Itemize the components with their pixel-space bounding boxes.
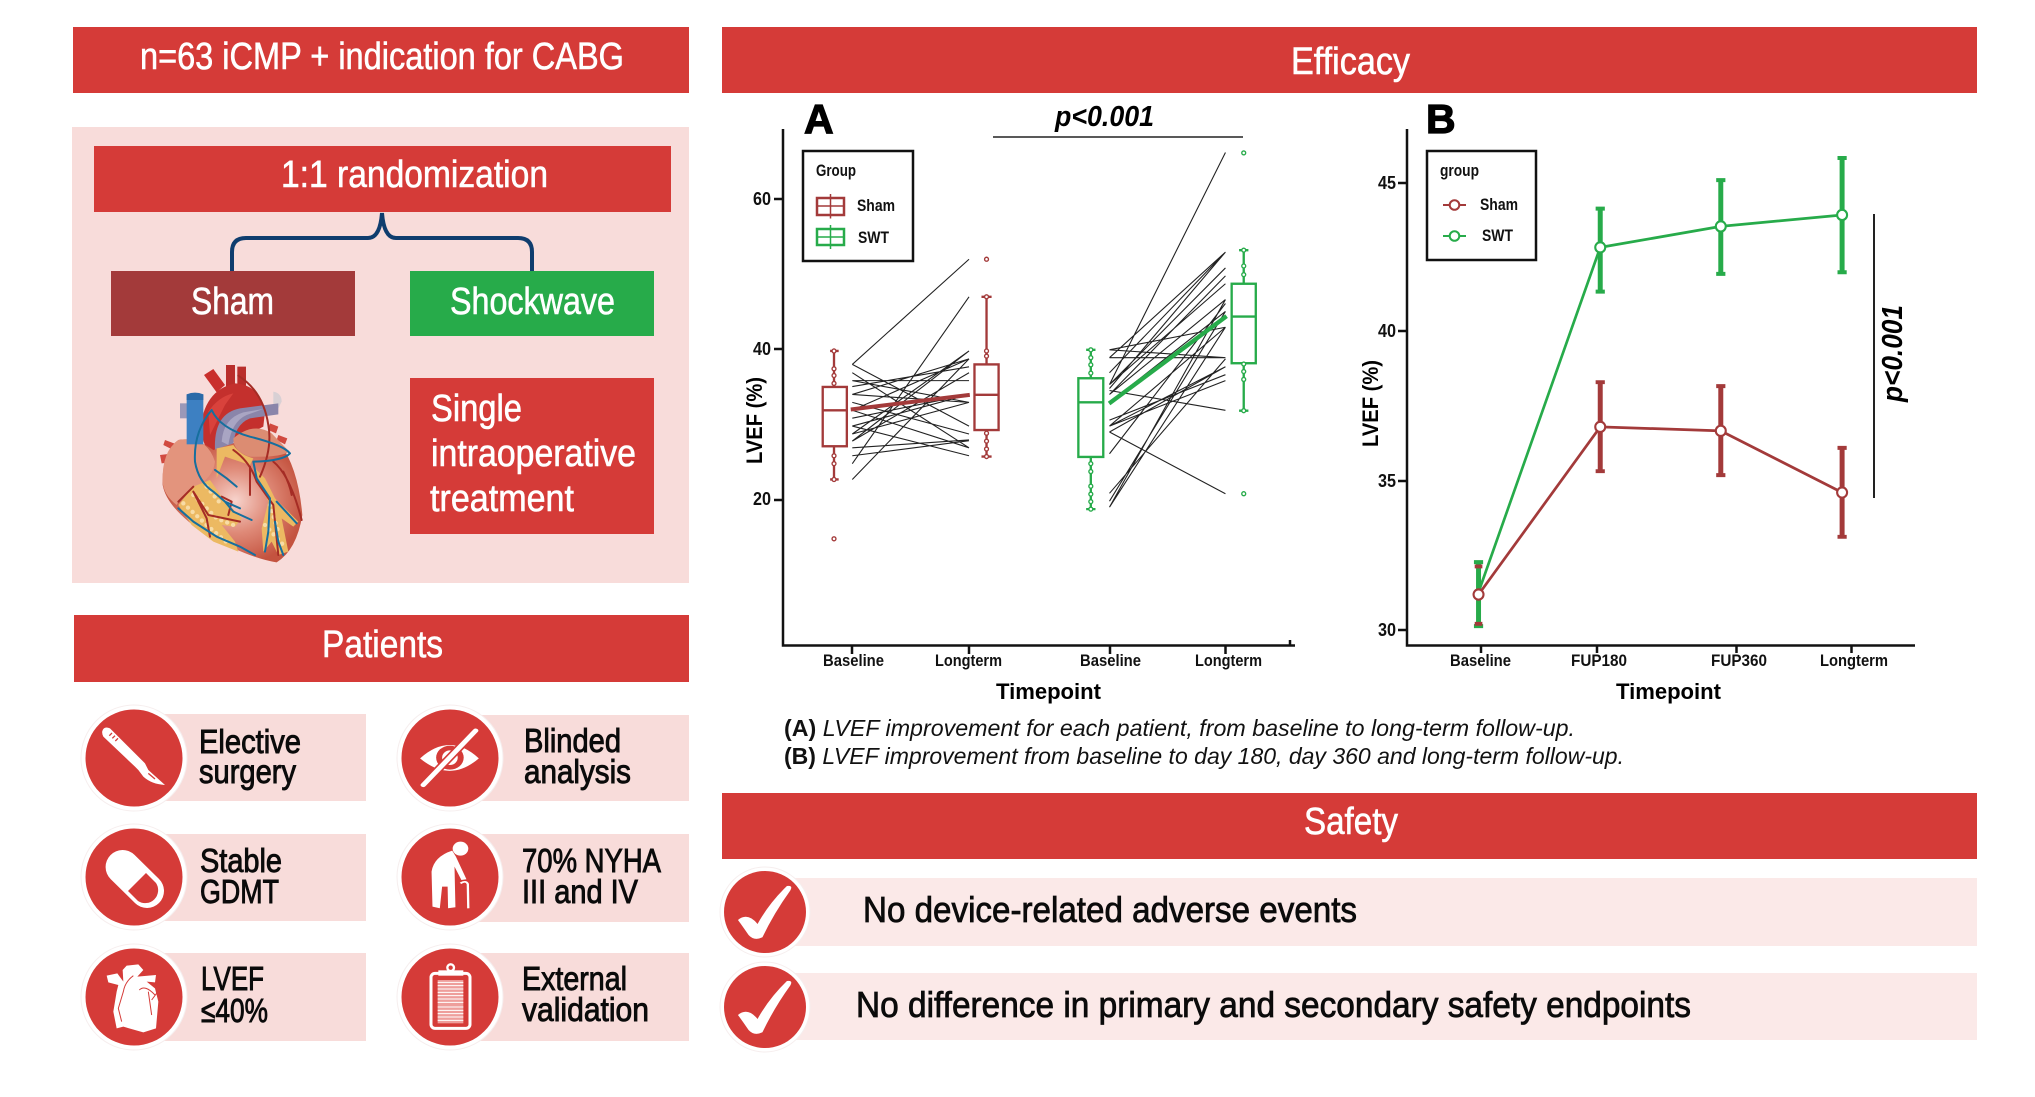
patient item: blinded analysis: Blinded: [524, 722, 621, 759]
chart A: individual LVEF change with box plots: Longterm: [1195, 651, 1262, 670]
safety item: adverse events: [720, 867, 1977, 957]
patient item: LVEF: LVEF: [201, 960, 264, 997]
safety item: adverse events: No device-related adverse events: [863, 889, 1357, 930]
patient item: elective surgery: [81, 705, 366, 811]
patient item: elective surgery: Elective: [199, 723, 301, 760]
chart captions: (B) LVEF improvement from baseline to day 180, day 360 and long-term follow-up.: [784, 743, 1624, 769]
icon: crossed eye: [420, 731, 479, 785]
patient item: LVEF: ≤40%: [201, 992, 268, 1029]
treatment box: Single: [431, 388, 522, 430]
chart A: individual LVEF change with box plots: Baseline: [823, 651, 884, 670]
treatment box: [410, 378, 654, 534]
icon: white heart: [107, 964, 158, 1032]
safety item: endpoints: [720, 962, 1977, 1052]
header: patients: Patients: [322, 624, 443, 666]
legend A: [803, 151, 913, 261]
patient item: external validation: validation: [522, 991, 649, 1028]
icon: anatomical heart: [160, 365, 302, 562]
axes B: [1398, 129, 1915, 653]
header: efficacy: [722, 27, 1977, 93]
chart captions: [784, 715, 1624, 769]
legend A: Sham: [857, 196, 895, 215]
legend B: Sham: [1480, 195, 1518, 214]
treatment box: treatment: [430, 478, 574, 520]
chart A: individual LVEF change with box plots: 60: [753, 189, 771, 209]
patient item: NYHA class: 70% NYHA: [522, 842, 661, 879]
patient item: external validation: External: [522, 960, 627, 997]
chart A: individual LVEF change with box plots: 20: [753, 489, 771, 509]
chart B: mean LVEF over time: FUP180: [1571, 651, 1627, 670]
chart captions: (A) LVEF improvement for each patient, from baseline to long-term follow-up.: [784, 715, 1575, 741]
header: patients: [74, 615, 689, 682]
sham patient lines: [852, 259, 969, 479]
safety item: endpoints: No difference in primary and secondary safety endpoints: [856, 984, 1691, 1025]
chart B: mean LVEF over time: Longterm: [1820, 651, 1888, 670]
legend B: SWT: [1482, 226, 1513, 245]
brace connector: [232, 213, 532, 271]
sham arm: Sham: [191, 281, 274, 323]
patient item: blinded analysis: analysis: [524, 753, 631, 790]
chart A: individual LVEF change with box plots: LVEF (%): [742, 377, 767, 464]
icon: check mark: [738, 886, 791, 939]
legend A: SWT: [858, 228, 889, 247]
mean lines: [851, 395, 970, 409]
shockwave arm: [410, 271, 654, 336]
randomization bar: 1:1 randomization: [281, 154, 548, 196]
p-value B: p<0.001: [1877, 305, 1909, 403]
sham arm: [111, 271, 355, 336]
chart A: individual LVEF change with box plots: [742, 96, 1295, 704]
header: study population: n=63 iCMP + indication for CABG: [140, 36, 624, 78]
header: safety: [722, 793, 1977, 859]
patient item: NYHA class: [397, 824, 689, 930]
plot marks B: [1474, 157, 1847, 627]
header: study population: [73, 27, 689, 93]
chart B: mean LVEF over time: [1358, 96, 1915, 704]
chart B: mean LVEF over time: 30: [1378, 620, 1396, 640]
legend B: group: [1440, 161, 1479, 180]
icon: elderly person with cane: [432, 842, 468, 908]
chart B: mean LVEF over time: 45: [1378, 173, 1396, 193]
patient item: elective surgery: surgery: [199, 753, 296, 790]
header: safety: Safety: [1304, 801, 1398, 843]
chart A: individual LVEF change with box plots: 40: [753, 339, 771, 359]
sham series: [1475, 381, 1847, 624]
treatment box: intraoperative: [431, 433, 636, 475]
chart A: individual LVEF change with box plots: Baseline: [1080, 651, 1141, 670]
chart B: mean LVEF over time: LVEF (%): [1358, 360, 1383, 447]
chart B: mean LVEF over time: 40: [1378, 321, 1396, 341]
patient item: external validation: [397, 944, 689, 1050]
chart B: mean LVEF over time: Timepoint: [1616, 679, 1722, 704]
chart B: mean LVEF over time: 35: [1378, 471, 1396, 491]
patient item: stable GDMT: GDMT: [200, 873, 279, 910]
patient item: LVEF: [81, 944, 366, 1050]
panel: randomization: [72, 127, 689, 583]
SWT box plots: [1078, 151, 1256, 511]
axes A: [774, 129, 1295, 654]
panel letter B: B: [1426, 96, 1456, 142]
p-value A: p<0.001: [1054, 101, 1154, 133]
sham box plots: [823, 257, 999, 541]
patient item: stable GDMT: Stable: [200, 842, 282, 879]
chart A: individual LVEF change with box plots: Timepoint: [996, 679, 1102, 704]
icon: scalpel: [102, 727, 165, 785]
plot marks A: [823, 151, 1256, 541]
SWT series: [1474, 157, 1847, 627]
icon: capsule: [123, 867, 158, 903]
chart A: individual LVEF change with box plots: Longterm: [935, 651, 1002, 670]
icon: check mark: [738, 981, 791, 1034]
panel letter A: A: [804, 96, 834, 142]
icon: clipboard: [431, 964, 470, 1028]
randomization bar: [94, 146, 671, 212]
legend B: [1427, 151, 1536, 260]
chart B: mean LVEF over time: FUP360: [1711, 651, 1767, 670]
patient item: stable GDMT: [81, 824, 366, 930]
patient item: blinded analysis: [397, 705, 689, 811]
legend A: Group: [816, 161, 856, 180]
shockwave arm: Shockwave: [450, 281, 615, 323]
header: efficacy: Efficacy: [1291, 41, 1410, 83]
SWT patient lines: [1109, 152, 1225, 507]
chart B: mean LVEF over time: Baseline: [1450, 651, 1511, 670]
patient item: NYHA class: III and IV: [522, 873, 638, 910]
